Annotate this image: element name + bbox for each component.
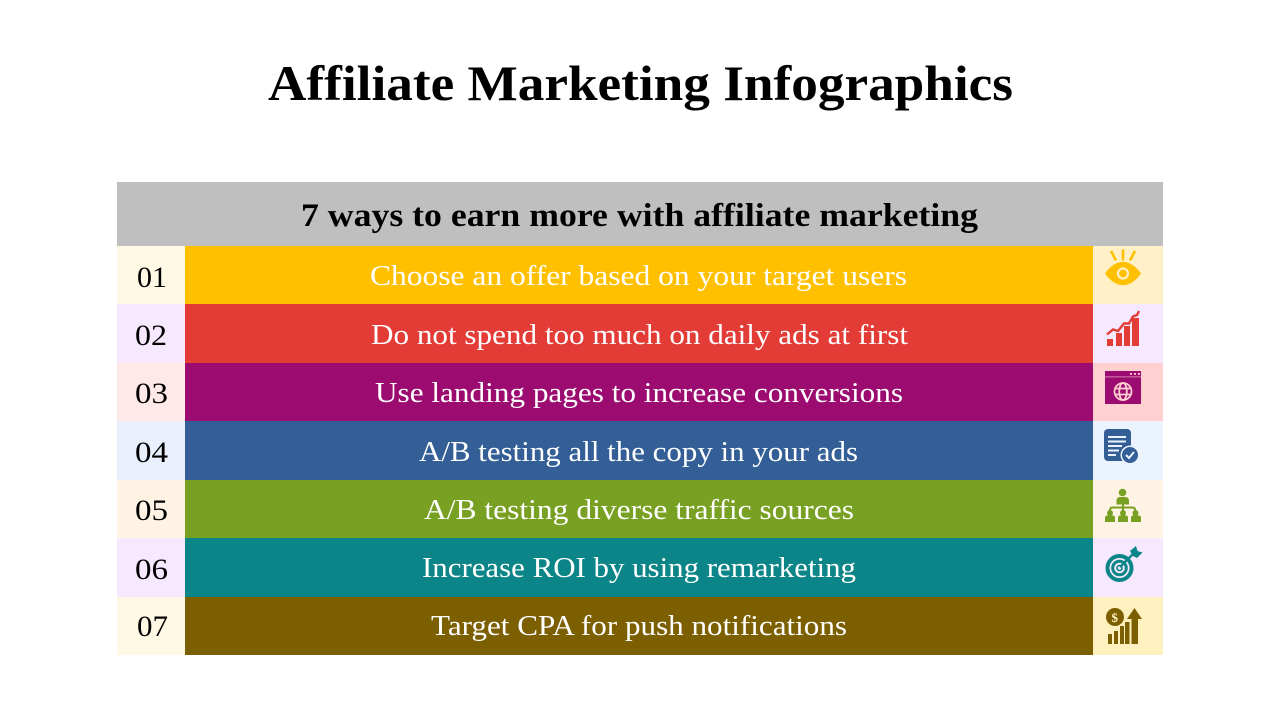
row 05: A/B testing diverse traffic sources <box>424 494 854 526</box>
table: 7 ways to earn more <box>117 182 1163 655</box>
row 06 <box>117 538 1163 597</box>
row 02: 02 <box>135 319 167 352</box>
row 02: Do not spend too much on daily ads at first <box>371 319 908 351</box>
row 01: 01 <box>137 261 167 294</box>
row 03: 03 <box>135 377 168 410</box>
row 06: Increase ROI by using remarketing <box>422 552 856 584</box>
row 02 <box>117 304 1163 363</box>
icon: document with check <box>1104 429 1140 464</box>
row 01: Choose an offer based on your target users <box>370 260 907 292</box>
icon: money growth <box>1106 608 1142 644</box>
icon: money growth: $ <box>1112 610 1118 625</box>
table header: 7 ways to earn more with affiliate marketing <box>301 198 979 234</box>
row 04 <box>117 421 1163 480</box>
row 04: 04 <box>135 436 168 469</box>
row 06: 06 <box>135 553 168 586</box>
table header <box>117 182 1163 246</box>
row 07: 07 <box>137 610 168 643</box>
row 03: Use landing pages to increase conversions <box>375 377 903 409</box>
row 01 <box>117 246 1163 304</box>
row 07: Target CPA for push notifications <box>431 610 847 642</box>
icon: growth chart <box>1107 311 1139 346</box>
row 05 <box>117 480 1163 538</box>
row 07 <box>117 597 1163 655</box>
row 03 <box>117 363 1163 421</box>
row 04: A/B testing all the copy in your ads <box>419 436 858 468</box>
icon: eye <box>1105 250 1141 285</box>
icon: target with dart <box>1108 546 1142 580</box>
row 05: 05 <box>135 494 168 527</box>
title: Affiliate Marketing Infographics <box>268 55 1013 111</box>
icon: org hierarchy <box>1105 489 1141 522</box>
icon: browser with globe <box>1105 371 1141 404</box>
